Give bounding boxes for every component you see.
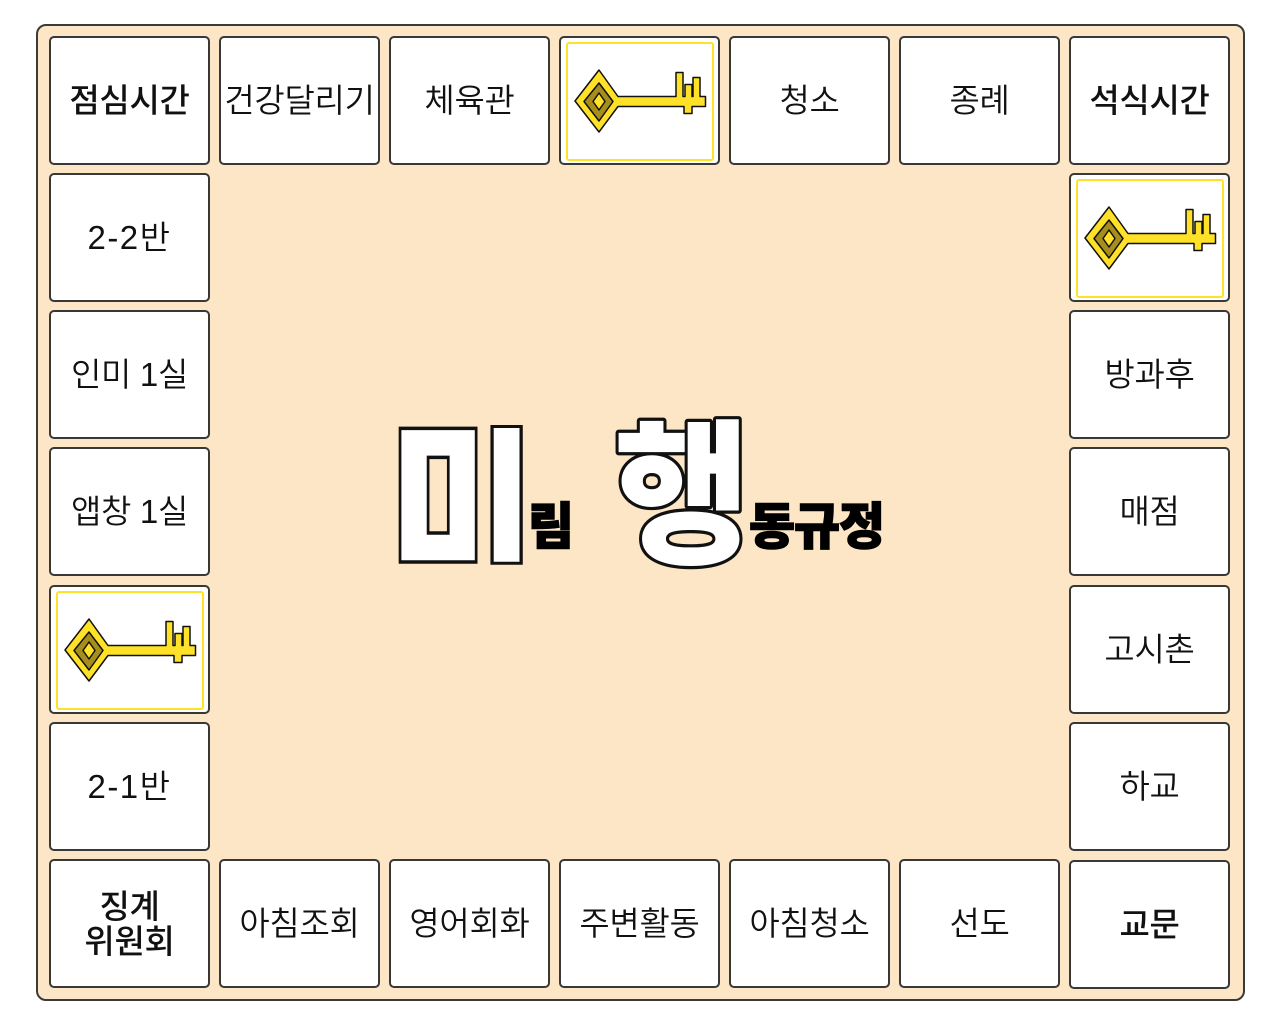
- cell: 선도: 선도: [949, 905, 1010, 942]
- title glyph: 미: 미: [389, 419, 535, 578]
- cell: 2-1반: 2-1반: [87, 768, 172, 805]
- cell: 체육관: 체육관: [424, 82, 515, 119]
- cell: 석식시간: 석식시간: [1089, 82, 1210, 119]
- title glyph: 미: 미: [389, 401, 535, 628]
- cell: 아침조회: 아침조회: [239, 905, 360, 942]
- cell: 점심시간: [49, 36, 210, 165]
- cell: 선도: [899, 859, 1060, 988]
- cell: 주변활동: 주변활동: [579, 905, 700, 942]
- cell: 주변활동: [559, 859, 720, 988]
- cell: 매점: [1069, 447, 1230, 576]
- cell: key right: [1069, 173, 1230, 302]
- cell: 교문: [1069, 860, 1230, 989]
- cell: 하교: 하교: [1119, 768, 1180, 805]
- cell: 매점: 매점: [1119, 493, 1180, 530]
- title glyph: 림: 림: [528, 499, 574, 555]
- title: 미림 행동규정: [398, 416, 882, 570]
- cell: 종례: [899, 36, 1060, 165]
- cell: 2-2반: [49, 173, 210, 302]
- cell: 석식시간: [1069, 36, 1230, 165]
- title glyphs: 동규정: 동규정: [749, 499, 884, 555]
- cell: 인미 1실: 인미 1실: [71, 356, 188, 393]
- cell: 앱창 1실: [49, 447, 210, 576]
- title glyph: 행: 행: [614, 411, 751, 585]
- cell: key top: [559, 36, 720, 165]
- cell: 영어회화: [389, 859, 550, 988]
- cell: 인미 1실: [49, 310, 210, 439]
- cell: 방과후: 방과후: [1104, 356, 1195, 393]
- cell: key left: [49, 585, 210, 714]
- cell: 고시촌: [1069, 585, 1230, 714]
- cell: 징계 위원회: [49, 859, 210, 988]
- cell: 징계 위원회: 위원회: [84, 922, 175, 960]
- cell: 2-1반: [49, 722, 210, 851]
- cell: 영어회화: 영어회화: [409, 905, 530, 942]
- cell: 징계 위원회: 징계: [99, 888, 160, 924]
- cell: 아침청소: [729, 859, 890, 988]
- cell: 청소: 청소: [779, 82, 840, 119]
- cell: 방과후: [1069, 310, 1230, 439]
- cell: 하교: [1069, 722, 1230, 851]
- cell: 청소: [729, 36, 890, 165]
- cell: 고시촌: 고시촌: [1104, 631, 1195, 668]
- cell: 앱창 1실: 앱창 1실: [71, 493, 188, 530]
- cell: 2-2반: 2-2반: [87, 219, 172, 256]
- cell: 체육관: [389, 36, 550, 165]
- cell: 건강달리기: [219, 36, 380, 165]
- cell: 아침청소: 아침청소: [749, 905, 870, 942]
- cell: 점심시간: 점심시간: [69, 82, 190, 119]
- cell: 아침조회: [219, 859, 380, 988]
- cell: 건강달리기: 건강달리기: [224, 82, 375, 119]
- cell: 종례: 종례: [949, 82, 1010, 119]
- cell: 교문: 교문: [1119, 906, 1180, 943]
